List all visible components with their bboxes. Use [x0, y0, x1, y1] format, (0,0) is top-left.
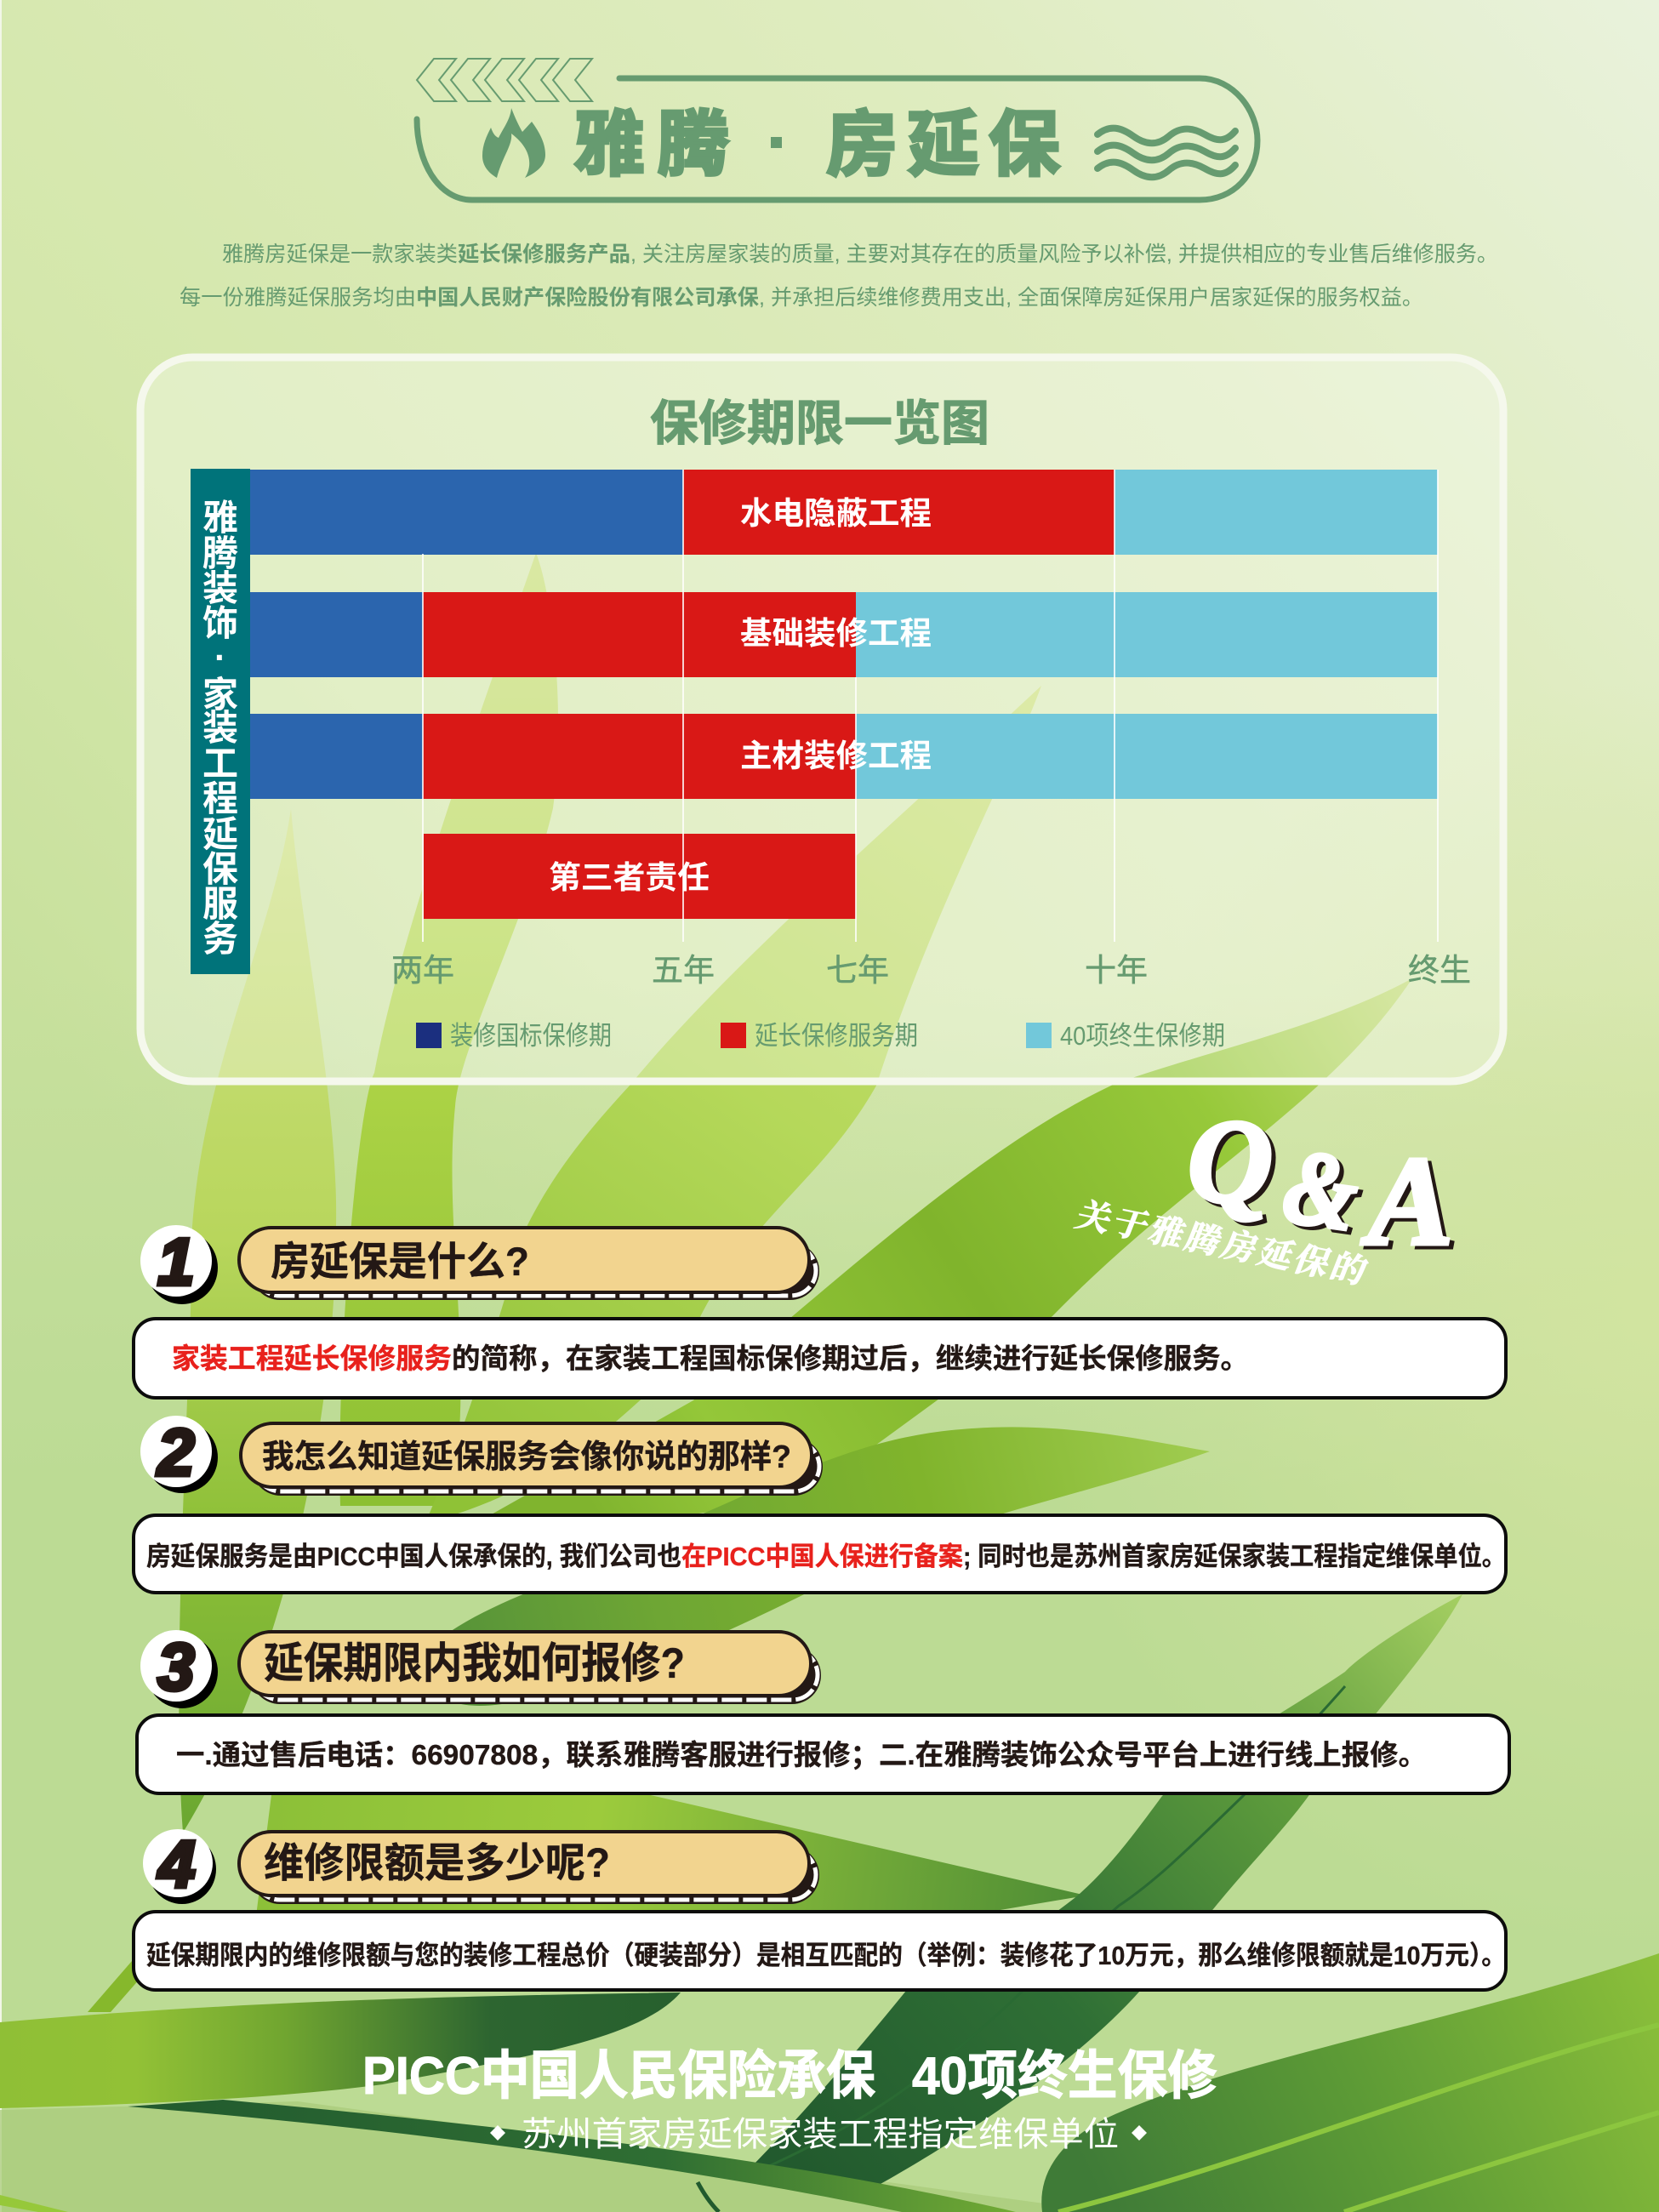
answer box 3: 一.通过售后电话：66907808，联系雅腾客服进行报修；二.在雅腾装饰公众号平台上进行线上报修。	[176, 1739, 1427, 1770]
Q&A brush heading: Q	[1188, 1096, 1273, 1228]
legend: 40项终生保修期	[1060, 1021, 1225, 1051]
title	[573, 105, 1060, 185]
timeline gridlines	[423, 470, 1438, 942]
bar labels	[549, 496, 932, 895]
footer slogan	[362, 2047, 1217, 2106]
question pill 2: 我怎么知道延保服务会像你说的那样?	[262, 1440, 791, 1475]
axis labels: 终生	[1408, 953, 1471, 988]
intro paragraph: 延长保修服务产品	[458, 242, 630, 266]
bar labels: 水电隐蔽工程	[740, 496, 932, 531]
icon: waves	[1097, 128, 1235, 177]
answer box 1	[134, 1319, 1506, 1398]
icon: flame	[482, 108, 545, 178]
Q&A brush heading: &	[1277, 1127, 1365, 1254]
answer box 2: 在PICC中国人保进行备案	[681, 1542, 963, 1571]
question 1	[134, 1224, 1506, 1398]
question 4	[134, 1827, 1506, 1990]
intro paragraph: , 并承担后续维修费用支出, 全面保障房延保用户居家延保的服务权益。	[759, 286, 1423, 310]
answer box 2: ; 同时也是苏州首家房延保家装工程指定维保单位。	[963, 1542, 1506, 1571]
axis labels: 十年	[1085, 953, 1148, 988]
question pill 4: 维修限额是多少呢?	[264, 1841, 610, 1886]
panel: warranty period chart	[140, 357, 1503, 1081]
number badge 1	[140, 1224, 218, 1304]
answer box 2	[134, 1515, 1506, 1593]
Q&A brush heading: 关于雅腾房延保的	[1070, 1189, 1376, 1293]
question pill 3: 延保期限内我如何报修?	[264, 1639, 685, 1687]
answer box 1: 家装工程延长保修服务	[172, 1343, 452, 1374]
legend: 装修国标保修期	[450, 1021, 612, 1051]
axis labels: 七年	[826, 953, 889, 988]
intro paragraph	[180, 242, 1498, 310]
answer box 2: 房延保服务是由PICC中国人保承保的, 我们公司也	[146, 1542, 681, 1571]
number badge 4	[143, 1827, 216, 1904]
header banner frame	[417, 78, 1257, 200]
intro paragraph: 雅腾房延保是一款家装类	[222, 242, 458, 266]
side label	[191, 469, 250, 974]
chart heading: 保修期限一览图	[650, 396, 989, 451]
question pill 1: 房延保是什么?	[271, 1239, 529, 1284]
bar row: 第三者责任	[424, 834, 856, 919]
footer slogan: 40项终生保修	[912, 2047, 1217, 2106]
footer subline with diamonds: 苏州首家房延保家装工程指定维保单位	[522, 2116, 1119, 2153]
Q&A brush heading: A	[1361, 1131, 1453, 1272]
legend	[416, 1021, 1225, 1051]
axis labels: 五年	[652, 953, 715, 988]
intro paragraph: 中国人民财产保险股份有限公司承保	[416, 286, 759, 310]
bar row: 水电隐蔽工程	[250, 470, 1438, 555]
bar labels: 第三者责任	[549, 860, 710, 895]
number badge 2: 2	[156, 1415, 195, 1490]
question 3	[137, 1629, 1509, 1793]
bar row: 主材装修工程	[250, 714, 1438, 799]
title: 房延保	[826, 105, 1060, 185]
side label: 雅腾装饰·家装工程延保服务	[202, 498, 238, 959]
question 2	[134, 1415, 1506, 1593]
number badge 2	[140, 1415, 218, 1493]
intro paragraph: , 关注房屋家装的质量, 主要对其存在的质量风险予以补偿, 并提供相应的专业售后维修服务。	[630, 242, 1498, 266]
axis labels	[391, 953, 1471, 988]
bar labels: 主材装修工程	[740, 738, 932, 773]
bar row: 基础装修工程	[250, 592, 1438, 677]
answer box 4: 延保期限内的维修限额与您的装修工程总价（硬装部分）是相互匹配的（举例：装修花了10万元，那么维修限额就是10万元）。	[146, 1941, 1506, 1970]
answer box 3	[137, 1715, 1509, 1793]
number badge 1: 1	[157, 1224, 195, 1299]
question pill 1	[239, 1228, 819, 1300]
Q&A brush heading	[1070, 1096, 1453, 1293]
number badge 4: 4	[157, 1827, 196, 1901]
intro paragraph: 每一份雅腾延保服务均由	[180, 286, 416, 310]
footer slogan: PICC中国人民保险承保	[362, 2047, 875, 2106]
question pill 4	[239, 1832, 819, 1904]
answer box 4	[134, 1912, 1506, 1990]
number badge 3	[140, 1629, 218, 1708]
legend: 延长保修服务期	[755, 1021, 918, 1051]
question pill 3	[239, 1632, 821, 1704]
axis labels: 两年	[391, 953, 454, 988]
answer box 1: 的简称，在家装工程国标保修期过后，继续进行延长保修服务。	[452, 1343, 1249, 1374]
question pill 2	[241, 1423, 823, 1496]
number badge 3: 3	[157, 1629, 195, 1704]
title: 雅腾	[573, 105, 729, 185]
bar labels: 基础装修工程	[740, 616, 932, 651]
icon: chevrons	[417, 59, 592, 101]
